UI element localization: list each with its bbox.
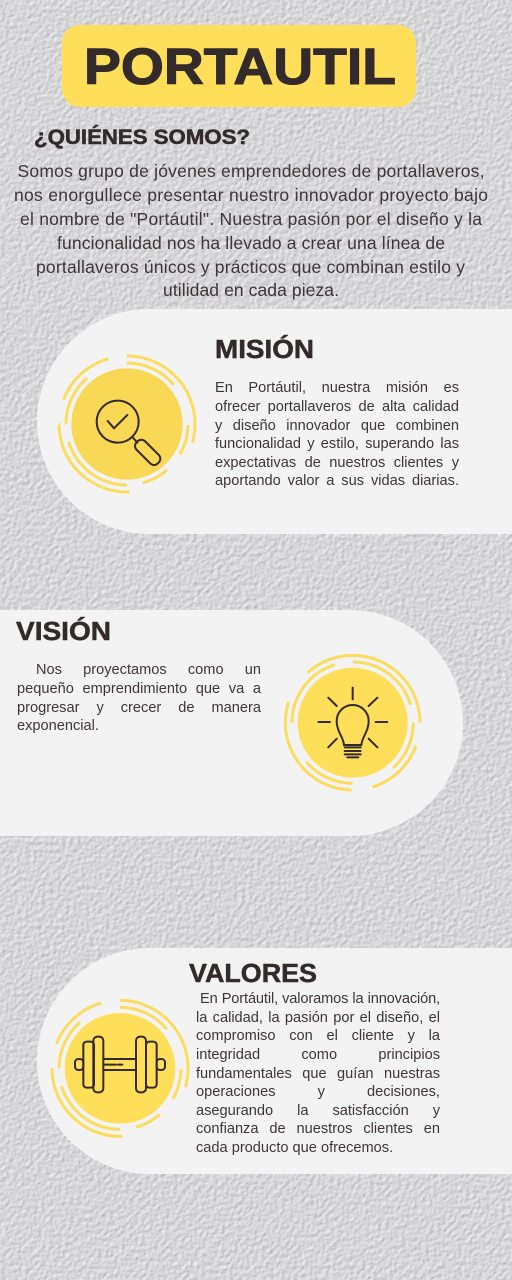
title text: PORTAUTIL [84, 38, 396, 95]
intro paragraph: portallaveros únicos y prácticos que combinan estilo y [36, 257, 465, 277]
text: valores: operaciones y decisiones, [196, 1084, 440, 1100]
text: valores: confianza de nuestros clientes en [196, 1121, 440, 1137]
heading: mision: MISIÓN [215, 334, 314, 364]
intro paragraph: Somos grupo de jóvenes emprendedores de portallaveros, [18, 161, 484, 181]
intro paragraph: funcionalidad nos ha llevado a crear una línea de [57, 233, 445, 253]
text: valores: fundamentales que guían nuestras [196, 1066, 440, 1082]
text: mision [215, 380, 459, 489]
title banner [62, 25, 416, 107]
text: vision: pequeño emprendimiento que va a [17, 681, 261, 697]
text: mision: expectativas de nuestros clientes y [215, 455, 459, 471]
text: valores: compromiso con el cliente y la [196, 1028, 440, 1044]
text: mision: funcionalidad y estilo, superando las [215, 436, 459, 452]
text: mision: aportando valor a sus vidas diarias. [215, 473, 459, 489]
icon: dumbbell [50, 998, 190, 1138]
text: mision: ofrecer portallaveros de alta calidad [215, 399, 459, 415]
heading: vision: VISIÓN [16, 616, 111, 646]
heading: quienes somos: ¿QUIÉNES SOMOS? [34, 126, 250, 149]
text: valores: integridad como principios [196, 1047, 440, 1063]
icon: light bulb [284, 654, 422, 792]
text: vision: Nos proyectamos como un [36, 662, 261, 678]
intro paragraph: utilidad en cada pieza. [163, 280, 339, 300]
icon: magnifying glass with check [58, 354, 196, 494]
text: valores: cada producto que ofrecemos. [196, 1140, 393, 1156]
text: valores: asegurando la satisfacción y [196, 1103, 440, 1119]
heading: valores: VALORES [189, 960, 317, 988]
text: vision [17, 662, 261, 734]
text: mision: En Portáutil, nuestra misión es [215, 380, 459, 396]
panel: vision [0, 610, 463, 836]
text: valores [196, 991, 440, 1156]
panel: mision [37, 309, 512, 534]
intro paragraph [14, 161, 488, 300]
intro paragraph: nos enorgullece presentar nuestro innovador proyecto bajo [14, 185, 488, 205]
text: mision: y diseño innovador que combinen [215, 418, 459, 434]
text: vision: exponencial. [17, 718, 99, 734]
text: valores: En Portáutil, valoramos la innovación, [200, 991, 440, 1007]
panel: valores [37, 948, 512, 1174]
text: valores: la calidad, la pasión por el diseño, el [196, 1010, 440, 1026]
text: vision: progresar y crecer de manera [17, 700, 261, 716]
intro paragraph: el nombre de "Portáutil". Nuestra pasión por el diseño y la [20, 209, 482, 229]
